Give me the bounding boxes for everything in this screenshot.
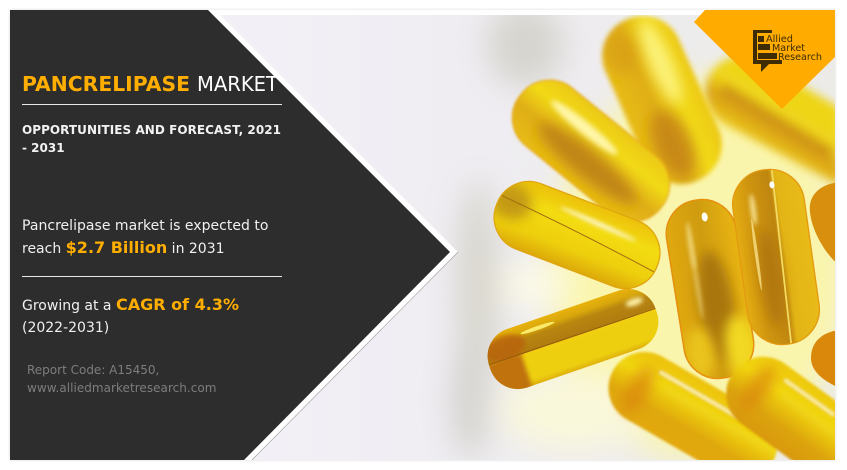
- capsule: top right blurred: [705, 56, 840, 186]
- capsule: centre upright amber: [665, 198, 755, 380]
- subtitle: - 2031: [22, 141, 65, 155]
- capsule: bottom right: [726, 357, 840, 465]
- CAGR statement: [22, 295, 239, 336]
- photo: yellow softgel capsules: [210, 3, 847, 465]
- forecast statement: reach $2.7 Billion in 2031: [22, 238, 225, 257]
- report code: [27, 363, 216, 395]
- capsule: right upright ridged: [732, 168, 820, 346]
- diagonal edge line: [252, 252, 458, 460]
- logo badge: [694, 10, 835, 109]
- capsule: bottom centre: [608, 352, 777, 465]
- capsule: right edge upper: [810, 182, 835, 262]
- capsule: large yellow: [493, 180, 661, 290]
- capsule: right edge lower: [811, 330, 835, 386]
- divider: [22, 276, 282, 278]
- forecast statement: Pancrelipase market is expected to: [22, 218, 268, 234]
- logo: Market: [772, 43, 805, 54]
- dark panel: [10, 10, 450, 460]
- logo: Allied: [766, 34, 793, 45]
- capsule: lower left two-tone: [488, 289, 658, 390]
- logo: Research: [778, 52, 822, 63]
- subtitle: OPPORTUNITIES AND FORECAST, 2021: [22, 123, 281, 137]
- forecast statement: [22, 218, 268, 257]
- divider: [22, 104, 282, 106]
- capsule: upper left blurred: [510, 78, 672, 222]
- report code: www.alliedmarketresearch.com: [27, 381, 216, 395]
- subtitle: [22, 123, 281, 155]
- title: PANCRELIPASE: [22, 72, 190, 96]
- CAGR statement: (2022-2031): [22, 320, 109, 336]
- logo: [753, 30, 822, 72]
- title: market: MARKET: [197, 72, 279, 96]
- CAGR statement: Growing at a CAGR of 4.3%: [22, 295, 239, 314]
- report code: Report Code: A15450,: [27, 363, 159, 377]
- capsule: top centre blurred: [598, 15, 726, 188]
